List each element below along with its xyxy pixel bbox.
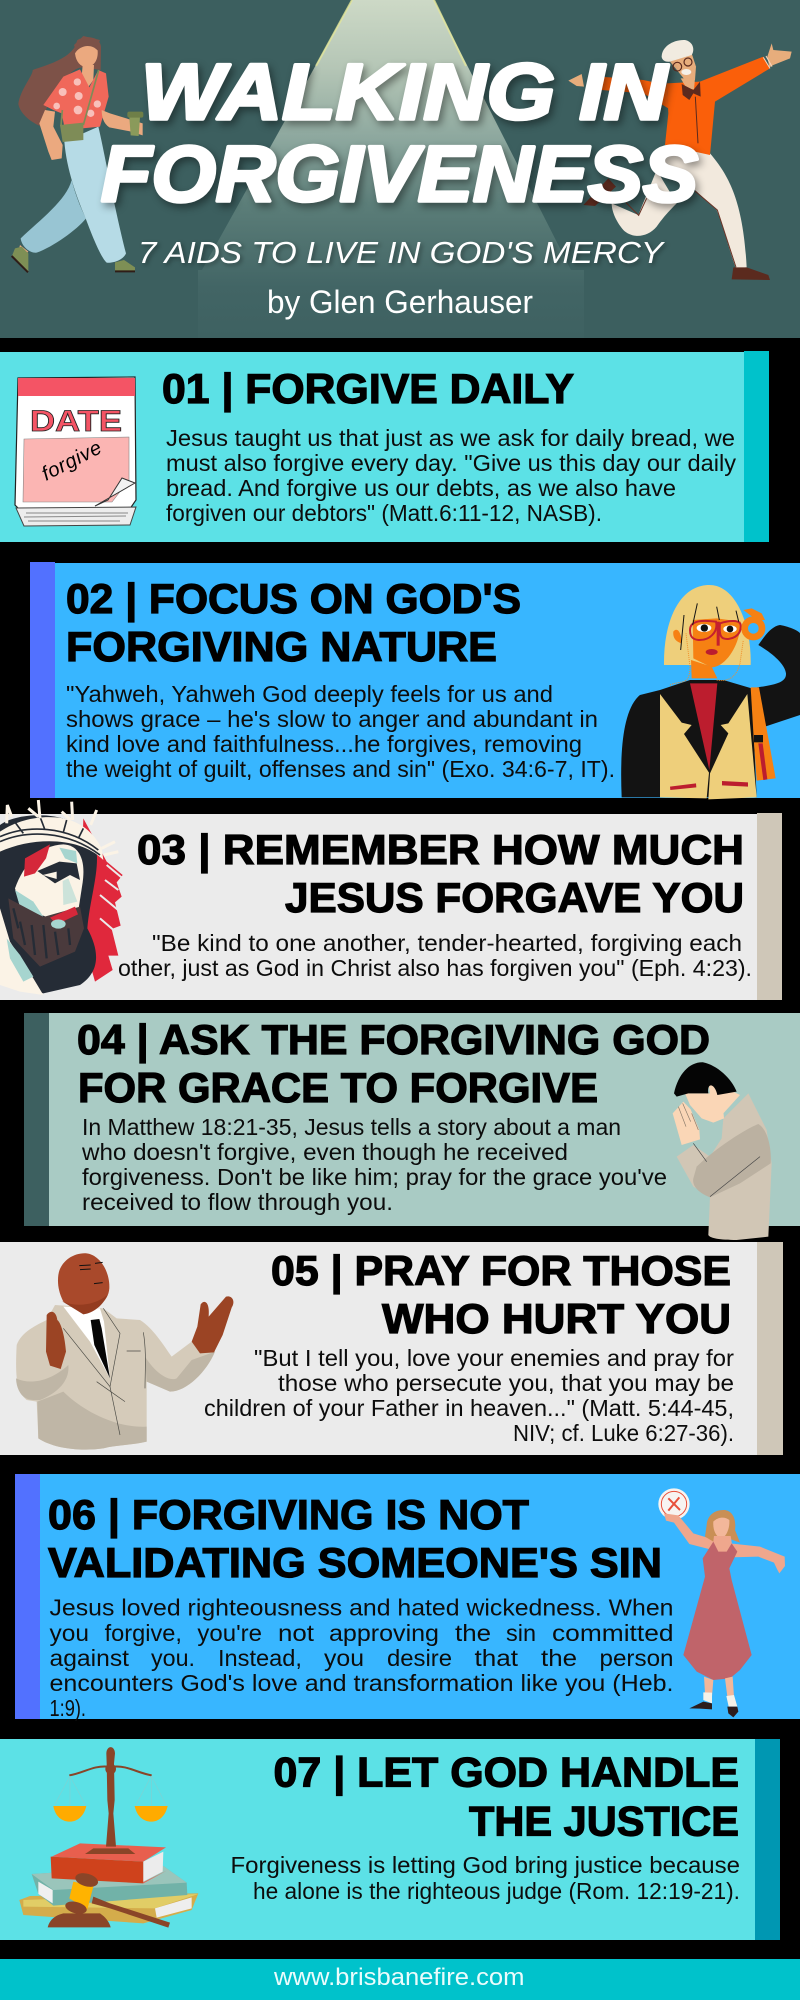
illustration: woman in red dress	[658, 1488, 785, 1717]
body text: you	[324, 1645, 364, 1671]
panel: 05 pray for those who hurt you	[0, 1242, 783, 1455]
body text: you.	[151, 1645, 195, 1671]
heading	[271, 1247, 731, 1342]
footer	[0, 1959, 800, 2000]
heading	[77, 1016, 710, 1111]
body text: against	[50, 1645, 130, 1671]
body text: encounters God's love and transformation like you (Heb.	[50, 1670, 674, 1696]
panel: 02 god's forgiving nature	[30, 562, 800, 799]
body text: "Be kind to one another, tender-hearted, forgiving each	[152, 930, 742, 956]
heading: JESUS FORGAVE YOU	[285, 874, 744, 921]
panel: 06 not validating sin	[15, 1474, 800, 1721]
heading: 07 | LET GOD HANDLE	[274, 1748, 739, 1796]
body text: forgiven our debtors" (Matt.6:11-12, NASB).	[166, 500, 602, 526]
heading: 02 | FOCUS ON GOD'S	[66, 575, 521, 623]
icon: calendar: DATE	[30, 405, 122, 438]
author byline: by Glen Gerhauser	[267, 284, 533, 320]
panel: header	[0, 0, 800, 338]
heading: VALIDATING SOMEONE'S SIN	[48, 1539, 662, 1586]
body text: Jesus taught us that just as we ask for daily bread, we	[166, 425, 735, 451]
illustration: jesus with crown of thorns	[0, 800, 123, 995]
body text	[118, 930, 752, 981]
body text: who doesn't forgive, even though he received	[81, 1139, 568, 1165]
body text: shows grace – he's slow to anger and abundant in	[66, 706, 598, 732]
body text: Forgiveness is letting God bring justice because	[230, 1852, 740, 1878]
heading	[48, 1491, 662, 1586]
title: FORGIVENESS	[101, 129, 698, 218]
panel: 01 forgive daily	[0, 351, 769, 542]
illustration: leaping man	[568, 40, 792, 280]
heading: 04 | ASK THE FORGIVING GOD	[77, 1016, 710, 1064]
body text	[166, 425, 736, 526]
body text	[204, 1345, 734, 1446]
body text: forgiveness. Don't be like him; pray for the grace you've	[82, 1164, 667, 1190]
body text	[66, 681, 615, 782]
body text: received to flow through you.	[82, 1189, 393, 1215]
illustration: woman with glasses	[621, 585, 800, 799]
body text: desire	[387, 1645, 452, 1671]
body text: the weight of guilt, offenses and sin" (Exo. 34:6-7, IT).	[66, 756, 615, 782]
body text: those who persecute you, that you may be	[278, 1370, 734, 1396]
body text: the	[541, 1645, 577, 1671]
body text: must also forgive every day. "Give us this day our daily	[166, 450, 736, 476]
footer: www.brisbanefire.com	[273, 1964, 524, 1991]
body text: "But I tell you, love your enemies and pray for	[254, 1345, 734, 1371]
heading: 06 | FORGIVING IS NOT	[48, 1491, 529, 1539]
body text: forgive,	[105, 1620, 182, 1646]
body text: "Yahweh, Yahweh God deeply feels for us and	[66, 681, 553, 707]
panel: 07 let god handle justice	[0, 1739, 780, 1940]
body text: In Matthew 18:21-35, Jesus tells a story about a man	[82, 1114, 621, 1140]
title	[101, 47, 698, 218]
title: WALKING IN	[141, 47, 669, 136]
body text: not	[278, 1620, 315, 1646]
panel: 04 ask for grace	[24, 1013, 800, 1240]
body text: 1:9).	[50, 1695, 86, 1721]
body text: you're	[197, 1620, 262, 1646]
body text	[230, 1852, 740, 1904]
body text: sin	[506, 1620, 536, 1646]
icon: calendar: forgive	[38, 437, 105, 485]
body text: person	[600, 1645, 674, 1671]
panel: 03 remember	[0, 800, 782, 1000]
heading: FORGIVING NATURE	[66, 623, 497, 670]
body text: children of your Father in heaven..." (Matt. 5:44-45,	[204, 1395, 734, 1421]
body text: bread. And forgive us our debts, as we also have	[166, 475, 676, 501]
body text: other, just as God in Christ also has forgiven you" (Eph. 4:23).	[118, 955, 752, 981]
body text: committed	[552, 1620, 674, 1646]
body text: kind love and faithfulness...he forgives, removing	[66, 731, 582, 757]
body text: you	[50, 1620, 89, 1646]
body text: Instead,	[218, 1645, 302, 1671]
heading: FOR GRACE TO FORGIVE	[78, 1064, 598, 1111]
body text: Jesus loved righteousness and hated wickedness. When	[50, 1594, 674, 1620]
illustration: man in beige suit	[16, 1253, 233, 1450]
heading	[274, 1748, 739, 1844]
body text: that	[474, 1645, 519, 1671]
illustration: praying man	[673, 1062, 772, 1240]
icon: calendar	[15, 377, 136, 526]
body text	[50, 1594, 674, 1721]
heading: WHO HURT YOU	[382, 1295, 731, 1342]
heading: 03 | REMEMBER HOW MUCH	[137, 826, 744, 874]
subtitle: 7 AIDS TO LIVE IN GOD'S MERCY	[138, 235, 665, 270]
body text: he alone is the righteous judge (Rom. 12:19-21).	[253, 1878, 740, 1904]
body text: approving	[329, 1620, 439, 1646]
heading: 05 | PRAY FOR THOSE	[271, 1247, 731, 1295]
body text: the	[455, 1620, 491, 1646]
heading	[137, 826, 744, 921]
heading: 01 | FORGIVE DAILY	[162, 365, 574, 413]
heading	[66, 575, 521, 670]
illustration: walking woman	[12, 36, 143, 272]
heading: THE JUSTICE	[469, 1798, 739, 1844]
body text	[81, 1114, 667, 1215]
body text: NIV; cf. Luke 6:27-36).	[513, 1420, 734, 1446]
illustration: scales, books and gavel	[19, 1747, 198, 1928]
